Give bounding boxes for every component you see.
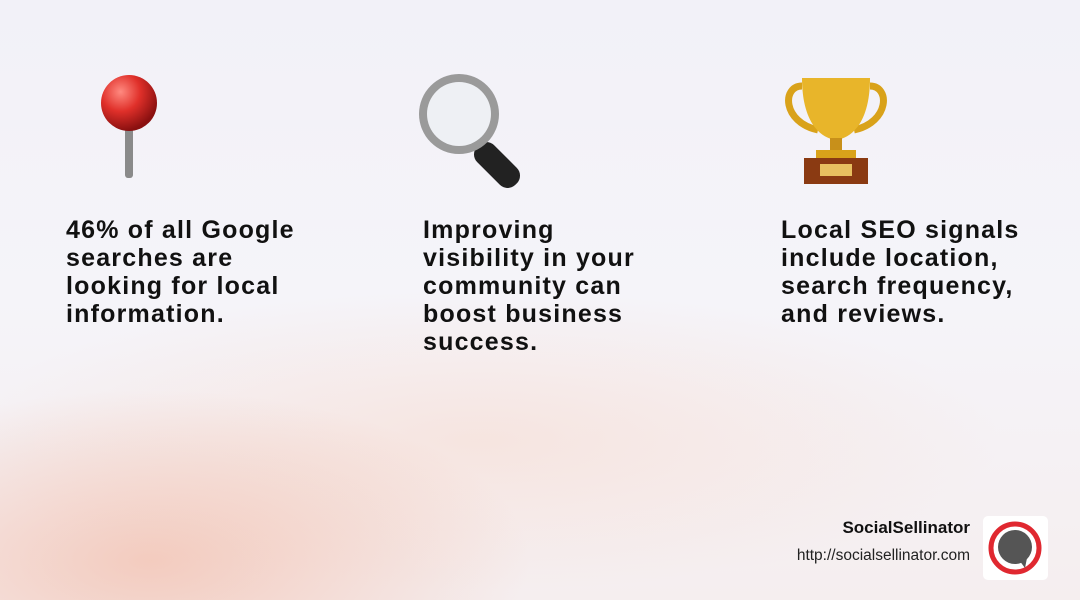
footer brand: SocialSellinator <box>842 518 970 537</box>
icon: pushpin <box>101 75 157 178</box>
footer brand: http://socialsellinator.com <box>797 547 970 564</box>
text: stat 3: Local SEO signals include location, search frequency, and reviews. <box>781 216 1020 328</box>
logo <box>983 516 1048 580</box>
text: stat 1: 46% of all Google searches are looking for local information. <box>66 216 295 328</box>
footer brand <box>797 518 970 564</box>
icon: trophy <box>785 78 887 184</box>
icon: magnifying glass <box>419 74 520 188</box>
text: stat 2: Improving visibility in your community can boost business success. <box>423 216 635 356</box>
